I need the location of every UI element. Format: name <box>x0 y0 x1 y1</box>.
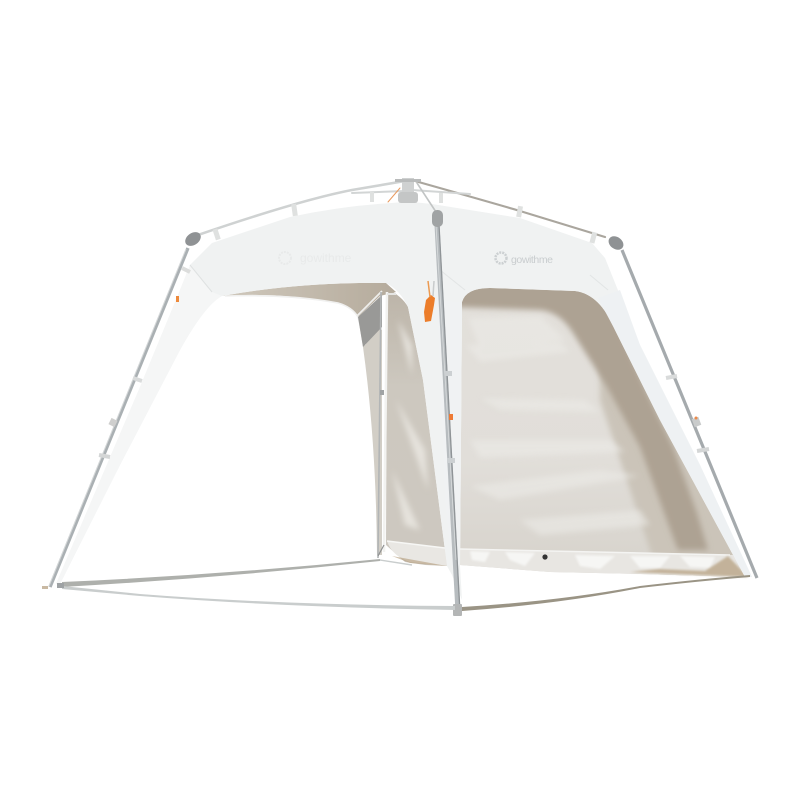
left front pole <box>49 248 190 587</box>
wall toggle <box>542 554 548 560</box>
wall hem <box>460 549 745 577</box>
front pole top joint <box>432 210 443 227</box>
right front pole <box>622 250 757 578</box>
brand logo right <box>496 252 553 266</box>
orange toggle <box>424 281 435 322</box>
side panel behind front corner <box>386 289 447 566</box>
tent product illustration <box>42 178 758 616</box>
left side strip of inner wall <box>358 317 382 555</box>
back wall panel <box>455 280 760 580</box>
brand logo left: gowithme <box>300 251 352 265</box>
canopy inner underside <box>222 283 396 345</box>
central front pole <box>436 225 462 616</box>
canopy shading <box>56 265 222 584</box>
wall highlights <box>466 316 650 535</box>
ground straps <box>42 559 750 611</box>
wall lighter right tone <box>598 376 733 576</box>
roof poles <box>195 181 605 237</box>
wall shadow band <box>455 280 708 550</box>
inner door pole <box>378 292 396 558</box>
right corner joint <box>606 233 626 253</box>
canopy roof <box>56 202 752 600</box>
roof clips <box>213 192 597 244</box>
central hub <box>395 178 421 203</box>
mesh window <box>357 291 382 347</box>
brand logo right: gowithme <box>511 254 553 266</box>
orange marker <box>176 296 179 302</box>
left corner joint <box>183 229 203 249</box>
